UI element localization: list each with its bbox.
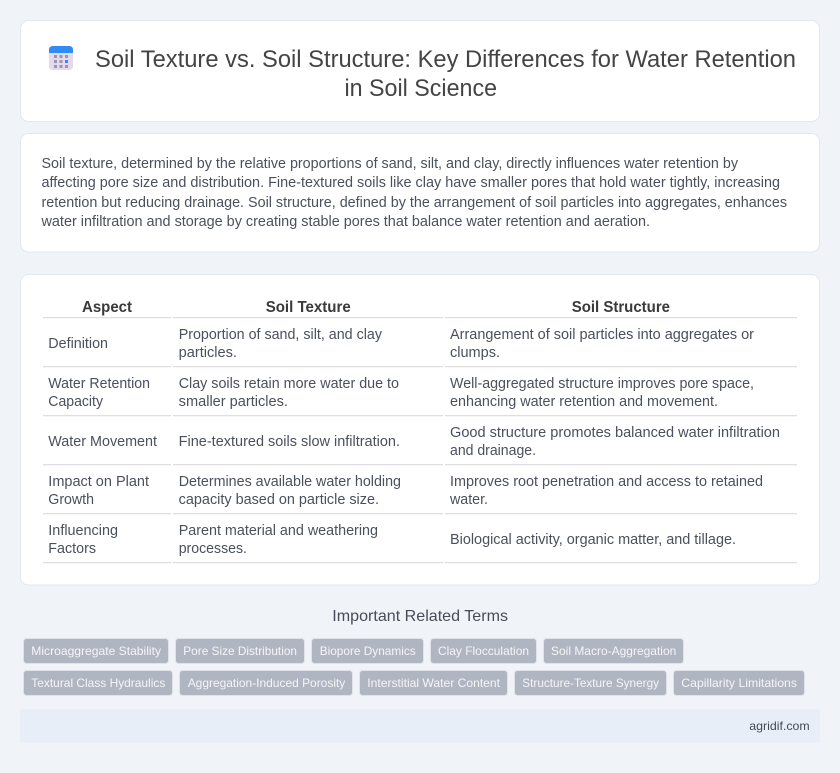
- related term tags: Aggregation-Induced Porosity: [188, 676, 345, 690]
- table row: influencing factors: processes.: [179, 541, 247, 557]
- table header row: Soil Structure: [572, 299, 670, 316]
- table row: water retention capacity: Water Retention: [48, 376, 150, 392]
- table row: impact on plant growth: water.: [449, 492, 488, 508]
- text block: introduction: [40, 156, 787, 230]
- text block: introduction: retention but reducing drainage. Soil structure, defined by the arrangement of soil particles into aggregates, enhances: [42, 195, 787, 211]
- footer: agridif.com: [749, 719, 810, 733]
- title: [95, 46, 796, 102]
- table row: definition: [48, 327, 754, 361]
- related term tags: Pore Size Distribution: [183, 644, 297, 658]
- table row: water retention capacity: [48, 376, 754, 410]
- table row: influencing factors: Biological activity, organic matter, and tillage.: [450, 532, 736, 548]
- table header row: Soil Texture: [266, 299, 351, 316]
- related term tags: Textural Class Hydraulics: [31, 676, 165, 690]
- table row: definition: particles.: [179, 345, 237, 361]
- table row: definition: Arrangement of soil particles into aggregates or: [450, 327, 754, 343]
- table row: impact on plant growth: Impact on Plant: [48, 474, 149, 490]
- table header row: Aspect: [82, 299, 133, 316]
- text block: introduction: water infiltration and storage by creating stable pores that balance water retention and aeration.: [40, 214, 650, 230]
- table row: water movement: Fine-textured soils slow infiltration.: [179, 434, 400, 450]
- table row: impact on plant growth: Growth: [48, 492, 94, 508]
- icon: calendar: [49, 46, 73, 70]
- related term tags: [24, 638, 804, 696]
- related term tags: Microaggregate Stability: [31, 644, 161, 658]
- table row: impact on plant growth: Improves root penetration and access to retained: [450, 474, 763, 490]
- related term tags: Structure-Texture Synergy: [522, 676, 659, 690]
- heading: important related terms: Important Related Terms: [332, 608, 508, 625]
- table row: influencing factors: [48, 523, 736, 557]
- panel: comparison table: [20, 274, 820, 585]
- table row: impact on plant growth: [48, 474, 763, 508]
- table header row: [82, 299, 670, 316]
- related term tags: Capillarity Limitations: [681, 676, 797, 690]
- table row: water retention capacity: Clay soils retain more water due to: [179, 376, 399, 392]
- table row: water movement: and drainage.: [450, 443, 536, 459]
- panel: title card: [20, 20, 820, 122]
- table row: water retention capacity: Well-aggregated structure improves pore space,: [450, 376, 754, 392]
- table row: influencing factors: Parent material and weathering: [179, 523, 378, 539]
- table row: water retention capacity: enhancing water retention and movement.: [450, 394, 718, 410]
- text block: introduction: Soil texture, determined by the relative proportions of sand, silt, and clay, directly influences water retention by: [42, 156, 739, 172]
- text block: introduction: affecting pore size and distribution. Fine-textured soils like clay have smaller pores that hold water tightly, increasing: [42, 175, 780, 191]
- related term tags: Clay Flocculation: [438, 644, 529, 658]
- table row: definition: Proportion of sand, silt, and clay: [179, 327, 383, 343]
- panel: introduction paragraph: [20, 134, 820, 252]
- footer: [20, 710, 820, 742]
- title: Soil Texture vs. Soil Structure: Key Differences for Water Retention: [95, 46, 796, 73]
- related term tags: Interstitial Water Content: [367, 676, 501, 690]
- table row: water movement: Water Movement: [48, 434, 157, 450]
- table row: water retention capacity: Capacity: [48, 394, 104, 410]
- table row: influencing factors: Influencing: [48, 523, 118, 539]
- title: in Soil Science: [344, 75, 497, 102]
- table row: impact on plant growth: capacity based on particle size.: [179, 492, 379, 508]
- table row: definition: clumps.: [450, 345, 500, 361]
- related term tags: Soil Macro-Aggregation: [551, 644, 676, 658]
- table row: definition: Definition: [48, 336, 108, 352]
- related term tags: Biopore Dynamics: [320, 644, 416, 658]
- table row: water retention capacity: smaller particles.: [179, 394, 288, 410]
- table row: water movement: [48, 425, 780, 459]
- table row: impact on plant growth: Determines available water holding: [179, 474, 401, 490]
- table row: water movement: Good structure promotes balanced water infiltration: [450, 425, 780, 441]
- table row: influencing factors: Factors: [48, 541, 96, 557]
